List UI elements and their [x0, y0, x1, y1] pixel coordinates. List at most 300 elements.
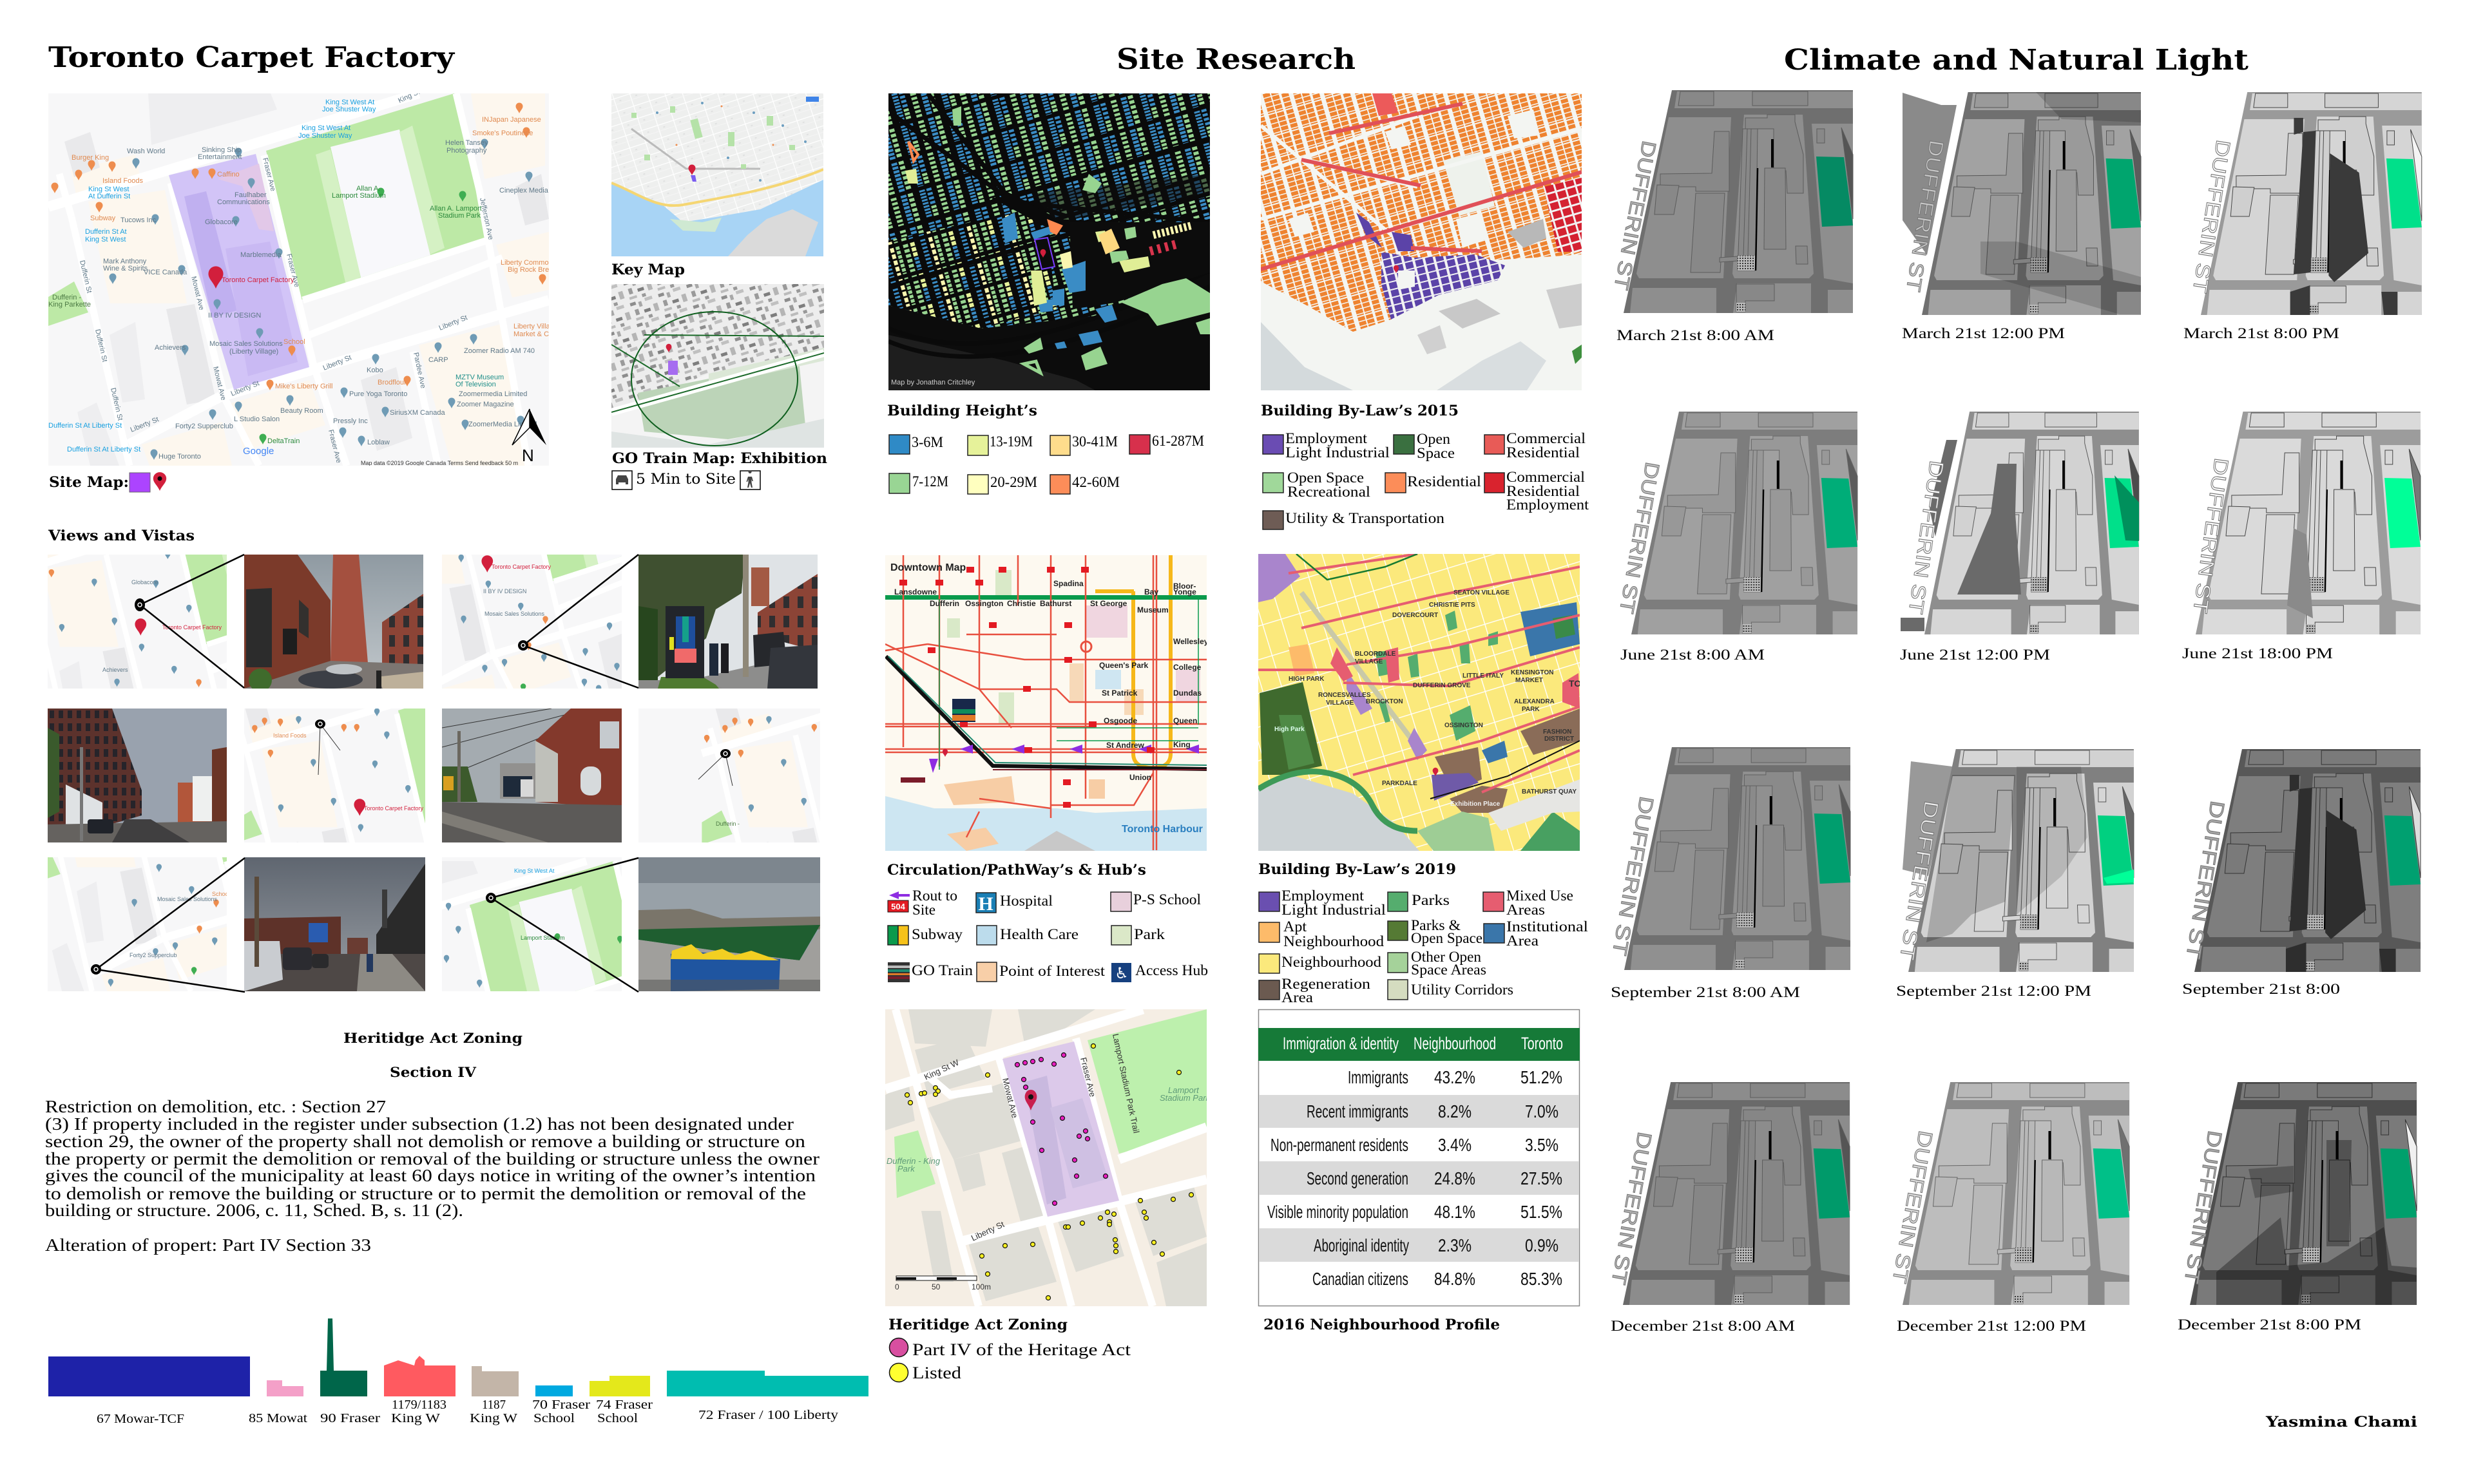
- site map panel: Mike's Liberty Grill: [275, 383, 333, 390]
- legend: circulation: Access Hub: [1135, 962, 1208, 978]
- table: 2016 neighbourhood profile: Toronto: [1521, 1034, 1563, 1053]
- views and vistas map 3: Toronto Carpet Factory: [364, 805, 424, 812]
- map: TTC downtown transit: Dufferin: [930, 599, 959, 608]
- sun study: June 21st 12:00 PM: June 21st 12:00 PM: [1900, 647, 2050, 663]
- map: TTC downtown transit: Ossington: [965, 599, 1003, 608]
- table: 2016 neighbourhood profile: Immigrants: [1348, 1067, 1408, 1087]
- map: building by-law 2019: Exhibition Place: [1450, 801, 1501, 808]
- views and vistas map 4: [638, 659, 1089, 955]
- building silhouettes elevation chart: 70 Fraser: [532, 1398, 590, 1412]
- map: TTC downtown transit: Wellesley: [1173, 637, 1209, 646]
- legend: by-law 2019: Open Space: [1411, 930, 1482, 946]
- site map panel: Dufferin St: [109, 387, 124, 421]
- icon: north arrow: [512, 409, 546, 465]
- views and vistas photo 1: brick chimney: [244, 555, 423, 692]
- legend: by-law 2019: Area: [1506, 933, 1539, 949]
- map: TTC downtown transit: Bathurst: [1040, 599, 1071, 608]
- site map panel: CARP: [428, 356, 448, 364]
- icon: north arrow: N: [522, 446, 534, 465]
- map: building by-law 2019: FASHION: [1543, 728, 1571, 736]
- heading: Heritidge Act Zoning: Heritidge Act Zoning: [343, 1030, 523, 1046]
- sun study: December 21st 8:00 PM: December 21st 8:00 PM: [2178, 1317, 2361, 1333]
- table: 2016 neighbourhood profile: 51.5%: [1520, 1202, 1562, 1222]
- map: TTC downtown transit: Bloor-: [1173, 582, 1196, 591]
- legend: circulation: Hospital: [1000, 893, 1053, 909]
- map: heritage act zoning: Mowat Ave: [1001, 1077, 1020, 1119]
- sun study: June 21st 8:00 AM: DUFFERIN ST: [1615, 461, 1664, 615]
- text block: heritage act excerpt: the property or permit the demolition or removal of the building or structure unless the owner: [45, 1149, 820, 1168]
- site map panel: Liberty St: [438, 314, 468, 332]
- site map panel: Liberty Commons at: [501, 259, 564, 267]
- map: TTC downtown transit: College: [1173, 663, 1202, 672]
- legend: circulation: P-S School: [1133, 891, 1201, 908]
- sun study: September 21st 8:00 AM: September 21st 8:00 AM: [1611, 984, 1800, 1000]
- building silhouettes elevation chart: [48, 1318, 868, 1426]
- legend: building heights: [889, 433, 1204, 494]
- site map panel: Jefferson Ave: [478, 197, 495, 240]
- table: 2016 neighbourhood profile: 51.2%: [1520, 1067, 1562, 1087]
- building silhouettes elevation chart: King W: [470, 1411, 517, 1425]
- sun study: March 21st 8:00 AM: March 21st 8:00 AM: [1616, 327, 1774, 343]
- table: 2016 neighbourhood profile: 27.5%: [1520, 1168, 1562, 1188]
- map: building by-law 2019: PARK: [1522, 706, 1540, 713]
- views and vistas map 2: Toronto Carpet Factory: [492, 564, 551, 570]
- site map panel: School: [283, 338, 305, 346]
- map: TTC downtown transit: Dundas: [1173, 689, 1202, 698]
- site map panel: Sinking Ship: [202, 146, 241, 154]
- heading: Building Height's: Building Height’s: [887, 403, 1037, 419]
- building silhouettes elevation chart: 67 Mowar-TCF: [97, 1412, 184, 1426]
- table: 2016 neighbourhood profile: Aboriginal identity: [1314, 1235, 1409, 1255]
- legend: circulation: Subway: [912, 926, 963, 942]
- building silhouettes elevation chart: 1179/1183: [392, 1398, 446, 1412]
- site map panel: Dufferin St At Liberty St: [67, 446, 140, 453]
- site map panel: King St West: [88, 186, 129, 193]
- map: building by-law 2019: KENSINGTON: [1511, 669, 1554, 676]
- site map panel: SiriusXM Canada: [390, 409, 445, 417]
- text block: heritage act excerpt: [45, 1097, 820, 1255]
- site map panel: MZTV Museum: [455, 374, 504, 381]
- site map panel: Zoomermedia Limited: [459, 390, 527, 398]
- legend: by-law 2015: Commercial: [1506, 430, 1586, 446]
- site map panel: Fraser Ave: [261, 157, 277, 192]
- site map panel: Subway: [90, 214, 116, 222]
- map: TTC downtown transit: Bay: [1144, 587, 1158, 596]
- legend: by-law 2015: Light Industrial: [1285, 444, 1390, 461]
- legend: by-law 2015: Residential: [1506, 483, 1580, 499]
- site map panel: Allan A. Lamport: [430, 205, 482, 213]
- site map panel: Forty2 Supperclub: [175, 423, 233, 430]
- map: building by-law 2019: High Park: [1274, 726, 1305, 733]
- heading: Circulation: Circulation/PathWay’s & Hub’s: [887, 862, 1146, 879]
- sun study: September 21st 8:00 AM: [1608, 747, 1850, 1000]
- views and vistas map 2: Mosaic Sales Solutions: [484, 611, 545, 617]
- map: heritage act zoning: Stadium Park: [1160, 1093, 1211, 1103]
- views and vistas map 5: Mosaic Sales Solutions: [157, 896, 218, 902]
- site map panel: L Studio Salon: [234, 415, 280, 423]
- map: building heights: Map by Jonathan Critchley: [891, 379, 975, 386]
- map: building by-law 2019: DUFFERIN GROVE: [1413, 682, 1471, 689]
- views and vistas photo 4: King W heritage building: [442, 709, 622, 842]
- table: 2016 neighbourhood profile: 85.3%: [1520, 1269, 1562, 1289]
- site map panel: Liberty St: [322, 354, 352, 372]
- text block: heritage act excerpt: building or structure. 2006, c. 11, Sched. B, s. 11 (2).: [45, 1201, 463, 1220]
- map: TTC downtown transit: [885, 555, 1209, 851]
- site map panel: Joe Shuster Way: [298, 132, 352, 140]
- site map panel: INJapan Japanese: [482, 116, 541, 124]
- table: 2016 neighbourhood profile: Non-permanent residents: [1271, 1135, 1408, 1155]
- site map panel: Toronto Carpet Factory: [222, 276, 294, 284]
- legend: by-law 2019: Areas: [1506, 902, 1545, 918]
- site map panel: Photography: [446, 147, 487, 155]
- map: TTC downtown transit: Union: [1129, 773, 1151, 782]
- legend: by-law 2019: Parks: [1412, 892, 1450, 908]
- table: 2016 neighbourhood profile: Immigration & identity: [1283, 1034, 1399, 1053]
- views and vistas photo 3: carpet factory street: [48, 709, 227, 842]
- legend: heritage zoning: [889, 1338, 1131, 1382]
- views and vistas map 2: [352, 415, 746, 711]
- sun study: December 21st 12:00 PM: DUFFERIN ST: [1888, 1129, 1937, 1285]
- site map panel: [39, 84, 564, 470]
- heading: Building By-Law's 2019: Building By-Law’s 2019: [1258, 861, 1456, 878]
- map: TTC downtown transit: Toronto Harbour: [1122, 824, 1203, 835]
- legend: by-law 2019: Utility Corridors: [1411, 982, 1513, 998]
- legend: by-law 2019: Neighbourhood: [1283, 933, 1385, 949]
- sun study: June 21st 8:00 AM: June 21st 8:00 AM: [1620, 647, 1765, 663]
- map: TTC downtown transit: King: [1173, 740, 1191, 749]
- building silhouettes elevation chart: 85 Mowat: [249, 1411, 307, 1425]
- site map panel: Pure Yoga Toronto: [349, 390, 407, 398]
- sun study: September 21st 8:00: DUFFERIN ST: [2182, 799, 2229, 960]
- site map panel: King Parkette: [48, 301, 91, 309]
- map: building by-law 2019: DISTRICT: [1544, 736, 1574, 743]
- legend: circulation: Site: [912, 902, 935, 918]
- legend: building heights: 7-12M: [912, 473, 948, 490]
- map: heritage act zoning: Dufferin - King: [887, 1156, 941, 1166]
- legend: by-law 2019: Employment: [1281, 888, 1365, 904]
- sun study: March 21st 8:00 PM: [2183, 92, 2422, 341]
- map: building by-law 2019: HIGH PARK: [1289, 676, 1325, 683]
- sun study: December 21st 8:00 AM: December 21st 8:00 AM: [1611, 1318, 1795, 1334]
- site map panel: Joe Shuster Way: [322, 106, 376, 113]
- legend: by-law 2015: Open Space: [1287, 470, 1364, 486]
- caption: Key Map: Key Map: [611, 262, 685, 278]
- site map panel: Tucows Inc: [120, 216, 157, 224]
- views and vistas map 5: School: [212, 891, 230, 897]
- views and vistas map 3: [224, 659, 618, 955]
- caption: 5 minutes to site with car and walk icons: [612, 470, 760, 490]
- heading: Section IV: Section IV: [390, 1064, 477, 1080]
- views and vistas map 3: Island Foods: [273, 732, 307, 739]
- sun study: June 21st 18:00 PM: DUFFERIN ST: [2189, 457, 2233, 615]
- site map panel: Fraser Ave: [327, 429, 343, 464]
- legend: by-law 2015: Commercial: [1506, 469, 1585, 485]
- site map panel: Big Rock Brewery: [508, 266, 564, 274]
- site map panel: Pressly Inc: [333, 417, 368, 425]
- building silhouettes elevation chart: 1187: [482, 1398, 506, 1412]
- title: Toronto Carpet Factory: Toronto Carpet Factory: [48, 41, 455, 74]
- map: building by-law 2019: VILLAGE: [1355, 658, 1383, 665]
- building silhouettes elevation chart: King W: [391, 1411, 440, 1425]
- sun study: March 21st 8:00 PM: March 21st 8:00 PM: [2183, 325, 2339, 341]
- sun study: December 21st 12:00 PM: December 21st 12:00 PM: [1897, 1318, 2086, 1334]
- table: 2016 neighbourhood profile: Visible minority population: [1267, 1202, 1408, 1222]
- table: 2016 neighbourhood profile: Recent immigrants: [1307, 1101, 1408, 1121]
- site map panel: Google: [243, 446, 274, 457]
- legend: circulation: Rout to: [912, 888, 957, 904]
- site map panel: Pardee Ave: [412, 352, 427, 389]
- legend: heritage zoning: Listed: [912, 1364, 961, 1382]
- map: heritage act zoning: Lamport Stadium Park Trail: [1111, 1033, 1142, 1134]
- legend: by-law 2015: Space: [1417, 445, 1455, 461]
- site map panel: Market & Cafe: [513, 330, 559, 338]
- sun study: September 21st 8:00: [2182, 749, 2421, 997]
- table: 2016 neighbourhood profile: [1258, 1010, 1580, 1306]
- table: 2016 neighbourhood profile: 48.1%: [1434, 1202, 1475, 1222]
- map: building by-law 2019: BLOORDALE: [1355, 651, 1396, 658]
- legend: circulation: Point of Interest: [999, 963, 1106, 979]
- site map panel: DeltaTrain: [267, 437, 300, 445]
- legend: by-law 2019: Institutional: [1506, 918, 1588, 935]
- site map panel: Zoomer Magazine: [457, 401, 514, 408]
- site map panel: Globacore: [205, 218, 238, 226]
- site map panel: Mowat Ave: [211, 366, 227, 401]
- sun study: December 21st 12:00 PM: [1888, 1082, 2129, 1334]
- sun study: March 21st 8:00 AM: DUFFERIN ST: [1609, 139, 1660, 292]
- map: building by-law 2019: BATHURST QUAY: [1522, 788, 1577, 795]
- sun study: March 21st 8:00 PM: DUFFERIN ST: [2189, 138, 2235, 294]
- map: building by-law 2019: RONCESVALLES: [1318, 692, 1371, 699]
- map: heritage act zoning: Liberty St: [970, 1219, 1006, 1243]
- site map panel: Dufferin St At Liberty St: [48, 422, 122, 430]
- site map panel: Wine & Spirits: [103, 265, 148, 272]
- text block: heritage act excerpt: gives the council of the municipality at least 60 days notice in writing of the owner’s intention: [45, 1166, 816, 1185]
- legend: circulation: H: [978, 893, 993, 915]
- map: building by-law 2019: DOVERCOURT: [1392, 612, 1438, 619]
- legend: by-law 2019: Area: [1281, 989, 1313, 1005]
- site map panel: Beauty Room: [280, 407, 323, 415]
- site map legend: Site Map:: [49, 474, 129, 491]
- legend: building heights: 30-41M: [1072, 433, 1118, 450]
- legend: by-law 2015: Residential: [1407, 473, 1481, 490]
- legend: by-law 2015: Employment: [1285, 430, 1368, 446]
- legend: circulation: Park: [1134, 926, 1165, 942]
- table: 2016 neighbourhood profile: 2.3%: [1438, 1235, 1472, 1255]
- table: 2016 neighbourhood profile: 8.2%: [1438, 1101, 1472, 1121]
- legend: circulation: GO Train: [912, 962, 973, 978]
- legend: building heights: 42-60M: [1072, 474, 1120, 490]
- site map panel: Cineplex Media: [499, 187, 549, 195]
- legend: heritage zoning: Part IV of the Heritage Act: [912, 1340, 1131, 1359]
- site map panel: Dufferin St: [93, 328, 108, 363]
- sun study: September 21st 12:00 PM: [1895, 749, 2134, 999]
- site map panel: Entertainment: [198, 153, 242, 161]
- legend: by-law 2015: Utility & Transportation: [1285, 510, 1445, 526]
- site map panel: Helen Tansey: [445, 139, 488, 147]
- map: building by-law 2019: MARKET: [1515, 677, 1543, 684]
- site map panel: Island Foods: [102, 177, 143, 185]
- site map panel: King St W: [397, 84, 429, 105]
- map: building by-law 2019: TOR: [1569, 678, 1587, 689]
- table: 2016 neighbourhood profile: Neighbourhood: [1414, 1034, 1496, 1053]
- site map panel: II BY IV DESIGN: [208, 312, 261, 319]
- map: heritage act zoning: 50: [932, 1282, 941, 1291]
- table: 2016 neighbourhood profile: Canadian citizens: [1312, 1269, 1408, 1289]
- site map panel: Achievers: [155, 344, 186, 352]
- table: 2016 neighbourhood profile: 0.9%: [1525, 1235, 1558, 1255]
- text block: heritage act excerpt: Restriction on demolition, etc. : Section 27: [45, 1097, 386, 1116]
- table: 2016 neighbourhood profile: Second generation: [1307, 1168, 1408, 1188]
- map: TTC downtown transit: Museum: [1137, 605, 1169, 614]
- map: TTC downtown transit: Queen: [1173, 716, 1197, 725]
- views and vistas map 6: Lamport Stadium: [521, 935, 565, 941]
- GO train map: [611, 284, 824, 448]
- text block: heritage act excerpt: to demolish or remove the building or structure or to permit the demolition or removal of the: [45, 1184, 806, 1203]
- building silhouettes elevation chart: 74 Fraser: [596, 1398, 653, 1412]
- heading: Views and Vistas: Views and Vistas: [48, 528, 195, 544]
- site map panel: Fraser Ave: [285, 253, 301, 288]
- site map panel: Mark Anthony: [103, 258, 147, 265]
- map: building by-law 2019: SEATON VILLAGE: [1453, 589, 1510, 596]
- site map panel: ZoomerMedia Limited: [468, 421, 537, 428]
- map: building by-law 2019: PARKDALE: [1382, 780, 1417, 787]
- views and vistas map 6: [296, 853, 690, 1149]
- map: building by-law 2019: BROCKTON: [1366, 698, 1403, 705]
- caption: 2016 Neighbourhood Profile: 2016 Neighbourhood Profile: [1263, 1317, 1500, 1333]
- building silhouettes elevation chart: 72 Fraser / 100 Liberty: [698, 1408, 838, 1422]
- table: 2016 neighbourhood profile: 24.8%: [1434, 1168, 1475, 1188]
- legend: by-law 2015: Open: [1417, 431, 1451, 447]
- site map panel: At Dufferin St: [88, 193, 130, 200]
- sun study: September 21st 8:00: September 21st 8:00: [2182, 981, 2340, 997]
- site map panel: VICE Canada: [144, 269, 187, 276]
- vista sight lines and eye markers: [91, 555, 733, 992]
- sun study: June 21st 12:00 PM: DUFFERIN ST: [1904, 459, 1948, 616]
- map: building heights: [888, 93, 1210, 390]
- site map legend: [49, 472, 166, 492]
- legend: by-law 2019: Regeneration: [1281, 976, 1371, 992]
- map: TTC downtown transit: St Andrew: [1106, 741, 1145, 750]
- map: building by-law 2015: [1261, 93, 1582, 390]
- map: heritage act zoning: Park: [897, 1164, 916, 1174]
- key map: [611, 93, 823, 256]
- table: 2016 neighbourhood profile: 3.4%: [1438, 1135, 1472, 1155]
- legend: by-law 2019: Light Industrial: [1281, 902, 1386, 918]
- site map panel: Map data ©2019 Google Canada Terms Send feedback 50 m: [361, 460, 518, 466]
- caption: GO Train Map: GO Train Map: Exhibition: [612, 450, 827, 467]
- map: TTC downtown transit: St Patrick: [1102, 689, 1138, 698]
- views and vistas map 1: [5, 479, 399, 774]
- map: TTC downtown transit: Lansdowne: [894, 587, 937, 596]
- sun study: December 21st 8:00 AM: [1607, 1082, 1850, 1334]
- sun study: December 21st 8:00 PM: [2178, 1082, 2417, 1333]
- title: Site Research: Site Research: [1117, 43, 1356, 76]
- text block: heritage act excerpt: section 29, the owner of the property shall not demolish or remove a building or structure on: [45, 1132, 806, 1151]
- legend: circulation: Health Care: [1000, 926, 1079, 942]
- map: heritage act zoning: King St W: [923, 1057, 961, 1082]
- site map panel: Stadium Park: [438, 212, 481, 220]
- views and vistas map 4: Dufferin -: [716, 821, 740, 827]
- caption: 5 minutes to site with car and walk icons: 5 Min to Site: [636, 471, 736, 488]
- legend: circulation: ♿: [1115, 964, 1129, 982]
- site map panel: Mosaic Sales Solutions: [209, 340, 283, 348]
- legend: by-law 2019: Space Areas: [1411, 962, 1486, 978]
- site map panel: King St West: [85, 236, 126, 243]
- sun study: June 21st 18:00 PM: [2182, 412, 2421, 661]
- map: heritage act zoning: 100m: [972, 1282, 991, 1291]
- views and vistas map 5: [23, 699, 417, 994]
- building silhouettes elevation chart: School: [533, 1411, 575, 1425]
- map: TTC downtown transit: Downtown Map: [890, 562, 966, 573]
- site map panel: Zoomer Radio AM 740: [464, 347, 535, 355]
- site map panel: Liberty St: [129, 415, 160, 434]
- legend: by-law 2019: Parks &: [1411, 917, 1461, 933]
- site map panel: King St West At: [302, 124, 350, 132]
- site map panel: Kobo: [367, 366, 383, 374]
- table: 2016 neighbourhood profile: 3.5%: [1525, 1135, 1558, 1155]
- sun study: June 21st 12:00 PM: [1900, 412, 2139, 663]
- site map panel: Lamport Stadium: [332, 192, 386, 200]
- site map panel: Dufferin St: [78, 260, 93, 294]
- legend: by-law 2015: Residential: [1506, 444, 1580, 461]
- site map panel: Communications: [217, 198, 270, 206]
- sun study: March 21st 8:00 AM: [1609, 90, 1853, 343]
- views and vistas map 1: Achievers: [102, 667, 128, 673]
- map: building by-law 2019: ALEXANDRA: [1514, 698, 1555, 705]
- sun study: September 21st 12:00 PM: September 21st 12:00 PM: [1896, 983, 2091, 999]
- map: TTC downtown transit: Yonge: [1173, 587, 1196, 596]
- map: building by-law 2019: LITTLE ITALY: [1462, 672, 1504, 680]
- map: heritage act zoning: Fraser Ave: [1079, 1056, 1098, 1098]
- views and vistas map 1: Toronto Carpet Factory: [162, 624, 222, 631]
- legend: by-law 2019: Mixed Use: [1506, 888, 1573, 904]
- map: TTC downtown transit: Spadina: [1053, 579, 1084, 588]
- legend: by-law 2019: Other Open: [1411, 949, 1482, 965]
- map: TTC downtown transit: Christie: [1007, 599, 1036, 608]
- legend: building heights: 20-29M: [990, 474, 1037, 490]
- site map panel: Marblemedia: [240, 251, 282, 259]
- legend: by-law 2015: Employment: [1506, 497, 1589, 513]
- legend: by-law 2019: [1259, 888, 1588, 1005]
- sun study: December 21st 8:00 PM: DUFFERIN ST: [2180, 1129, 2227, 1285]
- building silhouettes elevation chart: 90 Fraser: [320, 1411, 380, 1425]
- table: 2016 neighbourhood profile: 7.0%: [1525, 1101, 1558, 1121]
- table: 2016 neighbourhood profile: 84.8%: [1434, 1269, 1475, 1289]
- map: TTC downtown transit: Osgoode: [1104, 716, 1137, 725]
- views and vistas map 5: Forty2 Supperclub: [129, 952, 177, 958]
- legend: by-law 2015: [1263, 430, 1589, 529]
- views and vistas photo 5: Mowat street at dusk: [244, 857, 425, 991]
- site map panel: Liberty Village: [513, 323, 558, 330]
- views and vistas photo 2: site sign and tree: [638, 555, 818, 689]
- sun study: June 21st 8:00 AM: [1615, 412, 1857, 663]
- site map panel: Brodflour: [378, 379, 407, 386]
- sun study: June 21st 18:00 PM: June 21st 18:00 PM: [2182, 645, 2333, 661]
- site map panel: Caffino: [217, 171, 240, 178]
- legend: by-law 2015: Recreational: [1287, 484, 1370, 500]
- views and vistas map 2: II BY IV DESIGN: [483, 588, 526, 595]
- site map panel: King St West At: [325, 99, 374, 106]
- text block: heritage act excerpt: Alteration of propert: Part IV Section 33: [45, 1235, 371, 1255]
- heading: Building By-Law's 2015: Building By-Law’s 2015: [1261, 403, 1459, 419]
- table: 2016 neighbourhood profile: 43.2%: [1434, 1067, 1475, 1087]
- site map panel: Liberty St: [230, 379, 260, 398]
- views and vistas map 1: Globacore: [131, 579, 158, 585]
- legend: building heights: 13-19M: [990, 433, 1033, 450]
- map: heritage act zoning: 0: [895, 1282, 899, 1291]
- legend: circulation: [888, 888, 1208, 982]
- map: building by-law 2019: VILLAGE: [1326, 699, 1354, 707]
